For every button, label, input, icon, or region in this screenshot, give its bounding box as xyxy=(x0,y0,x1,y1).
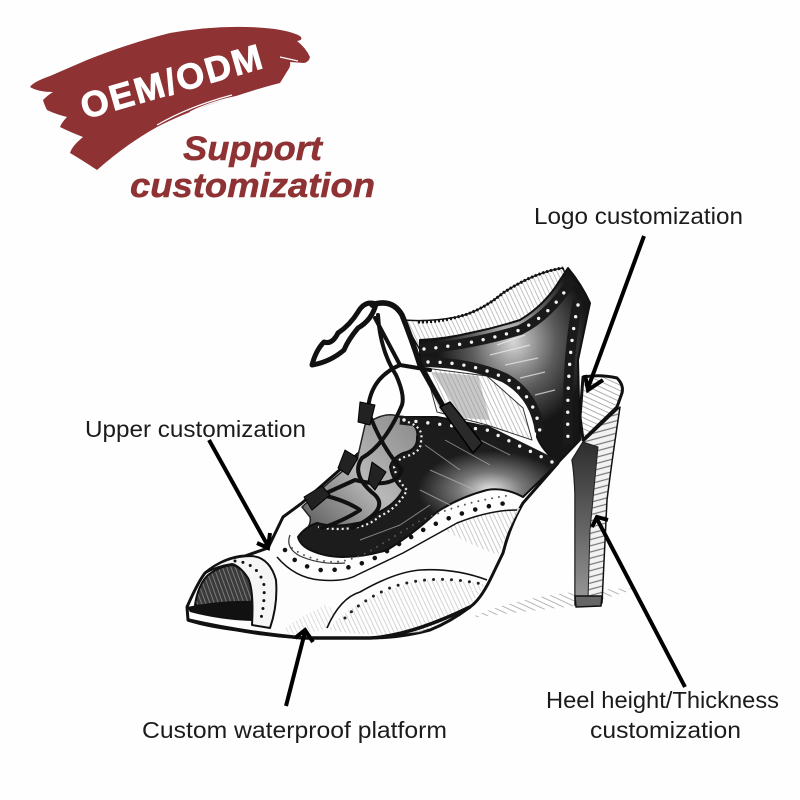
heading: Support customization: customization xyxy=(130,167,375,205)
inner opening lining xyxy=(425,368,532,440)
label: Custom waterproof platform: Custom waterproof platform xyxy=(142,717,447,743)
toe hatch shade xyxy=(285,605,335,635)
dark panel top trim xyxy=(400,420,556,464)
back quarter perforations xyxy=(424,284,578,440)
illustration: high-heel shoe xyxy=(187,268,640,638)
platform black edge xyxy=(187,601,252,621)
arrow: heel xyxy=(592,517,685,687)
back quarter dark leather xyxy=(420,268,590,463)
opening gray shade xyxy=(432,372,490,420)
upper lining xyxy=(403,268,575,350)
dark vamp panel xyxy=(298,417,558,557)
heel inner dark face xyxy=(572,442,598,603)
dark panel fur strokes xyxy=(360,435,510,540)
brush stroke shape xyxy=(30,27,310,170)
vamp hatch shade xyxy=(445,508,520,555)
brush highlights xyxy=(157,57,298,125)
heel seat insole xyxy=(580,376,622,440)
dark panel top perforations xyxy=(404,420,552,462)
badge: OEM/ODM brush stroke xyxy=(30,27,310,170)
label: Logo customization: Logo customization xyxy=(534,203,743,229)
lower wing hatch shade xyxy=(330,580,485,635)
label: Heel height/Thickness customization: customization xyxy=(590,717,741,743)
lace loop xyxy=(312,303,376,365)
brogue band small dots xyxy=(292,495,512,562)
crossing laces xyxy=(322,315,430,528)
vamp white body xyxy=(187,417,558,638)
label: Upper customization: Upper customization xyxy=(85,416,306,442)
wing dots xyxy=(345,579,482,618)
toe cap band xyxy=(205,556,276,628)
arrow: platform xyxy=(286,630,313,706)
label: Heel height/Thickness customization xyxy=(546,687,779,743)
arrow: upper xyxy=(209,440,270,548)
back quarter fur strokes xyxy=(490,335,555,395)
wing panel perforation row xyxy=(327,570,487,628)
heel tip xyxy=(575,596,602,607)
sole line xyxy=(188,607,470,638)
heading: Support customization xyxy=(130,130,375,205)
toe cap dots xyxy=(235,561,264,622)
lace tassel xyxy=(440,402,482,453)
knot and tail xyxy=(372,303,444,408)
gauze lace opening xyxy=(302,415,417,533)
ground shadow xyxy=(470,588,640,618)
lining scalloped edge xyxy=(418,268,563,322)
arrow: logo xyxy=(585,236,644,390)
label: Heel height/Thickness customization: Heel height/Thickness xyxy=(546,687,779,713)
peep-toe opening xyxy=(195,565,252,617)
lace eyelet tabs xyxy=(304,402,386,510)
heel stiletto xyxy=(572,407,620,605)
heading: Support customization: Support xyxy=(183,130,324,168)
badge text: OEM/ODM xyxy=(76,36,267,127)
laces xyxy=(312,303,444,528)
brogue band outer line xyxy=(277,510,517,580)
back quarter black trims xyxy=(420,280,578,445)
brogue band inner line xyxy=(289,535,345,563)
brogue band large dots xyxy=(285,502,514,570)
scalloped edge white stitch xyxy=(318,422,421,529)
